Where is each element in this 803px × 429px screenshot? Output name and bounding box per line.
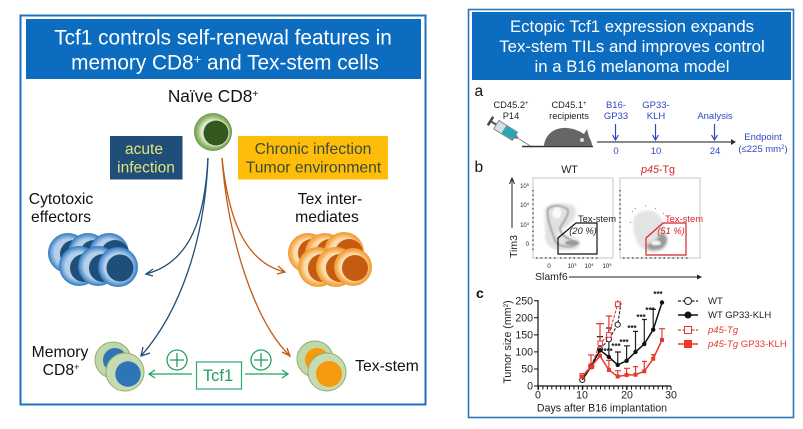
significance stars: *** <box>619 338 630 347</box>
callout: acute infection: acute <box>125 141 163 158</box>
flow plot axes: 10 <box>520 184 527 190</box>
schedule a: labels: + <box>525 101 529 107</box>
callout: acute infection: infection <box>117 160 175 177</box>
chart legend <box>678 296 787 350</box>
left panel heading: memory CD8 <box>71 52 194 74</box>
chart axes: Tumor size (mm <box>502 308 514 384</box>
schedule a: timepoints: 0 <box>613 146 619 157</box>
flow plot axes: 5 <box>609 262 612 267</box>
schedule a: timepoints: GP33 <box>604 111 628 122</box>
icon: Tex-stem cells <box>297 341 346 391</box>
flow plot: p45-Tg <box>620 178 703 258</box>
icon: syringe <box>487 116 535 152</box>
significance stars: *** <box>627 324 638 333</box>
chart legend: WT <box>708 296 723 307</box>
arrow: naive to Tex-stem <box>222 158 290 356</box>
flow plot: WT <box>533 178 616 258</box>
label: cytotoxic effectors <box>29 191 93 226</box>
significance stars: *** <box>653 290 664 299</box>
Tcf1 box: Tcf1 <box>203 367 233 385</box>
flow plot titles: WT <box>561 164 578 176</box>
label: cytotoxic effectors: effectors <box>31 209 91 226</box>
label: memory CD8: + <box>74 362 79 372</box>
schedule a: timepoints: Endpoint <box>744 132 782 143</box>
panel c label: c <box>476 285 484 301</box>
chart axes: 50 <box>521 364 533 376</box>
schedule a: timepoints: ) <box>784 144 788 155</box>
label: naive CD8: Naïve CD8 <box>168 86 252 106</box>
schedule a: labels: CD45.2 <box>493 100 525 110</box>
flow plot axes: 0 <box>526 242 530 248</box>
flow plot titles <box>561 164 675 176</box>
panel: Tcf1 self-renewal model <box>20 16 426 404</box>
chart axes: 250 <box>515 296 533 308</box>
arrow: naive to effectors <box>146 158 208 276</box>
flow plot axes: 10 <box>603 264 609 270</box>
chart axes: 0 <box>535 390 541 402</box>
chart axes: 100 <box>515 346 533 358</box>
label: Tex intermediates: mediates <box>295 209 359 226</box>
left panel heading <box>26 19 421 79</box>
label: Tex-stem: Tex-stem <box>355 358 419 375</box>
right panel heading: Tex-stem TILs and improves control <box>499 37 765 56</box>
chart legend: p45-Tg GP33-KLH <box>707 339 787 350</box>
right panel heading <box>472 12 791 80</box>
schedule a: timepoints: Analysis <box>697 111 733 122</box>
label: memory CD8: CD8 <box>43 362 74 379</box>
schedule a: timepoints: 24 <box>710 146 720 157</box>
flow plot: WT: (20 %) <box>569 225 597 236</box>
series: p45-Tg GP33-KLH <box>580 338 664 378</box>
series: WT <box>580 303 621 382</box>
callout: chronic infection / tumor environment: Chronic infection <box>255 141 371 158</box>
icon: memory cells <box>95 342 144 391</box>
flow plot axes: 3 <box>527 221 530 226</box>
callout: acute infection <box>110 136 182 180</box>
label: memory CD8 <box>32 344 88 379</box>
icon: naive cell <box>194 113 232 151</box>
significance stars <box>603 290 664 356</box>
label: cytotoxic effectors: Cytotoxic <box>29 191 93 208</box>
schedule a: timepoints: GP33- <box>642 100 670 111</box>
schedule a: timeline <box>597 139 736 145</box>
panel a label: a <box>474 83 484 100</box>
Tcf1 box <box>196 362 242 389</box>
panel: ectopic Tcf1 results <box>468 10 794 418</box>
callout: chronic infection / tumor environment: Tumor environment <box>246 160 382 177</box>
left panel heading: + <box>194 52 201 66</box>
chart legend: p45-Tg <box>707 325 739 336</box>
callout: chronic infection / tumor environment <box>238 136 388 180</box>
flow plot axes: 3 <box>574 262 577 267</box>
schedule a: timepoints: 2 <box>781 145 785 151</box>
schedule a: timepoints: (≤225 mm <box>738 144 781 155</box>
schedule a: labels: P14 <box>503 111 519 121</box>
schedule a: labels: recipients <box>549 111 589 121</box>
chart axes: 2 <box>503 304 510 308</box>
significance stars: *** <box>611 342 622 351</box>
icon: mouse <box>522 128 593 146</box>
left panel heading: Tcf1 controls self-renewal features in <box>54 26 392 50</box>
schedule a: labels <box>493 100 589 121</box>
left panel heading: and Tex-stem cells <box>201 52 379 74</box>
chart axes: Days after B16 implantation <box>537 402 667 414</box>
series: p45-Tg <box>580 301 621 378</box>
significance stars: *** <box>603 347 614 356</box>
flow plot: p45-Tg: (51 %) <box>657 225 685 236</box>
right panel heading: in a B16 melanoma model <box>535 57 729 76</box>
arrow: Tcf1 to Tex-stem <box>245 370 288 378</box>
flow plot axes: 4 <box>591 262 594 267</box>
chart axes: 0 <box>527 380 533 392</box>
chart axes: 10 <box>576 390 588 402</box>
right panel heading: Ectopic Tcf1 expression expands <box>510 17 754 36</box>
schedule a: timepoints: B16- <box>606 100 626 111</box>
chart axes: ) <box>502 300 514 304</box>
flow plot: WT: Tex-stem <box>578 213 616 224</box>
schedule a: labels: + <box>583 101 587 107</box>
significance stars: *** <box>645 306 656 315</box>
flow plot axes: 10 <box>520 223 527 229</box>
chart axes: 200 <box>515 312 533 324</box>
icon: Tex intermediate cell cluster <box>288 232 372 287</box>
significance stars: *** <box>636 313 647 322</box>
chart axes: 150 <box>515 330 533 342</box>
schedule a: timepoints: KLH <box>647 111 665 122</box>
icon: plus right <box>251 350 271 370</box>
flow plot axes: 10 <box>568 264 574 270</box>
flow plot axes: 0 <box>547 264 551 270</box>
error bars <box>597 309 656 365</box>
line chart: tumor size <box>502 290 677 414</box>
chart axes: 20 <box>621 390 633 402</box>
panel b label: b <box>474 159 483 176</box>
chart axes: 30 <box>665 390 677 402</box>
chart axes <box>502 296 677 414</box>
schedule a: labels: CD45.1 <box>551 100 583 110</box>
chart legend: WT GP33-KLH <box>708 310 771 321</box>
flow plot: p45-Tg: Tex-stem <box>665 213 703 224</box>
flow plot axes <box>508 178 702 283</box>
flow plot axes: 10 <box>585 264 591 270</box>
label: Tex intermediates: Tex inter- <box>298 191 362 208</box>
icon: effector cell cluster <box>48 233 138 287</box>
label: Tex intermediates <box>295 191 362 226</box>
arrow: Tcf1 to memory <box>149 370 192 378</box>
schedule a: timepoints <box>604 100 788 157</box>
series: WT GP33-KLH <box>582 300 664 380</box>
icon: plus left <box>167 350 187 370</box>
label: naive CD8: + <box>252 89 258 100</box>
flow plot axes: Slamf6 <box>535 271 568 283</box>
arrow: naive to memory <box>141 158 208 356</box>
flow plot titles: p45-Tg <box>640 164 675 176</box>
flow plot axes: 4 <box>527 201 530 206</box>
flow plot axes: 10 <box>520 203 527 209</box>
flow plot axes: 5 <box>527 182 530 187</box>
schedule a: timepoints: 10 <box>651 146 661 157</box>
arrow: naive to Tex intermediates <box>222 158 285 274</box>
flow plot axes: Tim3 <box>508 235 520 258</box>
label: memory CD8: Memory <box>32 344 88 361</box>
